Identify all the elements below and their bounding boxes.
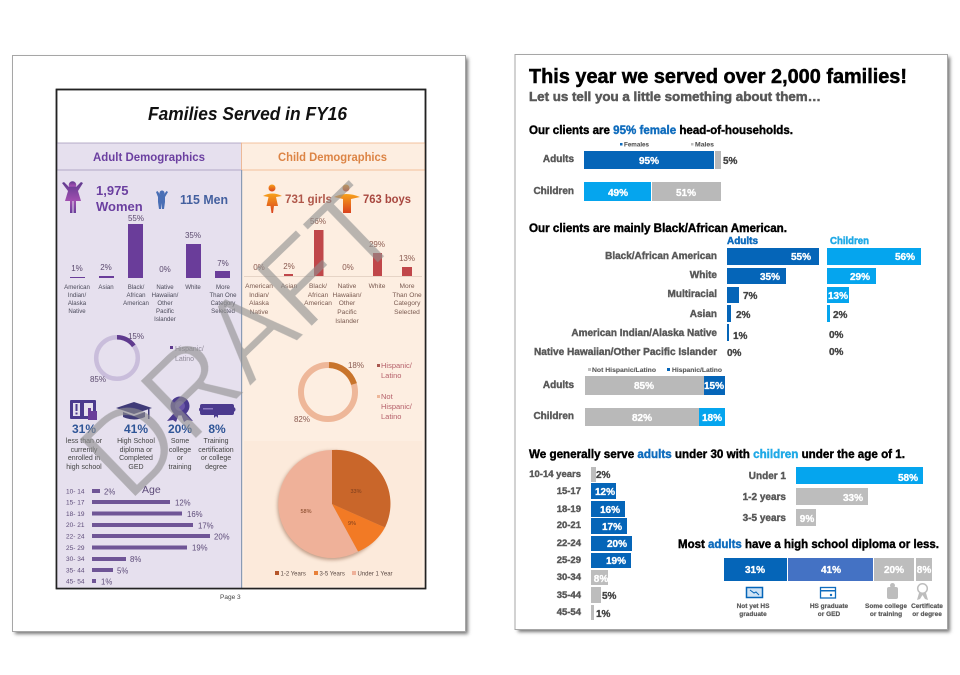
- bars: adult ages: 10-14 years: [529, 469, 581, 480]
- bar chart: adult race: American: [123, 300, 149, 307]
- education stats: currently: [71, 447, 98, 454]
- education stats: Some: [171, 438, 189, 445]
- bars: adult ages: 2%: [596, 470, 611, 481]
- education stats: degree: [205, 464, 227, 471]
- bar chart: adult race: Category: [211, 300, 236, 307]
- column headings: Adults: [727, 236, 758, 247]
- section: age: [529, 449, 923, 620]
- bar chart: child race: African: [308, 292, 329, 299]
- bar chart: child race: 2%: [283, 262, 295, 271]
- donut: child hispanic share: Hispanic/: [381, 402, 413, 411]
- bars: child ages: 33%: [843, 493, 863, 504]
- education stats: certification: [198, 447, 234, 454]
- pie chart: child age: 58%: [300, 509, 312, 515]
- bar chart: child race: Islander: [335, 318, 360, 325]
- stacked bars: Adults: [543, 380, 574, 391]
- bar chart: adult age: 10- 14: [66, 488, 85, 496]
- title: This year we served over 2,000 families!: [529, 65, 907, 88]
- education stats: 31%: [72, 422, 96, 436]
- bars: children: 0%: [829, 330, 844, 341]
- bar chart: adult age: 20- 21: [66, 522, 85, 529]
- education stats: [66, 422, 234, 471]
- bar chart: adult race: Alaska: [68, 300, 87, 307]
- pie chart: child age: 3-5 Years: [320, 572, 345, 578]
- bar chart: adult age: 18- 19: [66, 511, 85, 518]
- panel: adult demographics: [57, 143, 242, 588]
- bars: children: 13%: [828, 291, 848, 302]
- donut: child hispanic share: Not: [381, 392, 394, 401]
- section: female head of household: [529, 125, 793, 201]
- bar chart: adult age: 2%: [104, 488, 115, 496]
- page number: Page 3: [220, 594, 241, 601]
- icon: certificate: [820, 588, 836, 598]
- heading: Our clients are mainly Black/African American.: [529, 223, 787, 235]
- bar chart: adult age: 15- 17: [66, 500, 85, 506]
- stacked bars: [533, 151, 738, 201]
- education stats: High School: [117, 438, 155, 445]
- donut: child hispanic share: Latino: [381, 371, 401, 380]
- bars: adult ages: 20%: [607, 539, 627, 550]
- stacked bars: 49%: [608, 188, 628, 199]
- donut: child hispanic share: 18%: [348, 361, 364, 370]
- race labels: Asian: [690, 309, 717, 320]
- bar chart: adult age: 35- 44: [66, 568, 85, 574]
- women count: Women: [96, 199, 143, 214]
- bar chart: adult race: White: [185, 284, 201, 291]
- bar chart: child race: Asian: [281, 283, 298, 290]
- legend: Males: [695, 142, 715, 148]
- bar chart: child race: Indian/: [249, 292, 269, 299]
- captions: HS graduate: [810, 603, 849, 610]
- legend: Hispanic/Latino: [672, 368, 722, 374]
- girls count: 731 girls: [285, 192, 332, 206]
- bar chart: adult age: 20%: [214, 532, 230, 542]
- bar chart: child race: American: [245, 283, 273, 290]
- bars: adult ages: 17%: [602, 522, 622, 533]
- race labels: Multiracial: [668, 289, 717, 300]
- education stats: Completed: [119, 455, 153, 462]
- bars: children: 29%: [850, 272, 870, 283]
- frame outline: [56, 90, 426, 588]
- education stats: high school: [66, 464, 102, 471]
- bars: child ages: 3-5 years: [743, 513, 786, 524]
- stacked bar: 20%: [884, 565, 904, 576]
- bar chart: adult age: 8%: [130, 555, 141, 564]
- bar chart: adult age: 45- 54: [66, 578, 85, 586]
- bars: adult ages: 15-17: [557, 486, 581, 497]
- bars: adult ages: 16%: [600, 505, 620, 516]
- bar chart: adult race: 2%: [100, 263, 112, 272]
- bars: adult ages: [529, 467, 632, 620]
- icon: girl: [263, 184, 282, 213]
- subtitle: Let us tell you a little something about them…: [529, 90, 821, 104]
- bar chart: adult race: Hawaiian/: [152, 292, 179, 299]
- women count: 1,975: [96, 183, 129, 198]
- captions: graduate: [739, 611, 767, 618]
- bar chart: adult race: [64, 214, 237, 323]
- bar chart: adult race: 7%: [217, 259, 229, 268]
- bar chart: adult race: Asian: [98, 284, 114, 291]
- bar chart: adult age: 1%: [101, 578, 112, 586]
- legend: Females: [624, 142, 650, 148]
- captions: or training: [870, 611, 902, 618]
- stacked bars: Children: [533, 186, 574, 197]
- bar chart: child race: Pacific: [337, 309, 357, 316]
- heading: We generally serve adults under 30 with children under the age of 1.: [529, 449, 905, 461]
- bar chart: adult race: 0%: [159, 265, 171, 274]
- title: Families Served in FY16: [148, 104, 348, 124]
- bars: adults: 2%: [736, 310, 751, 321]
- bar chart: child race: [244, 217, 422, 325]
- bar chart: adult race: African: [127, 292, 145, 299]
- bars: adult ages: 45-54: [557, 607, 582, 618]
- education stats: Training: [203, 438, 229, 445]
- bar chart: adult race: Pacific: [156, 308, 174, 315]
- bar chart: child race: White: [369, 283, 386, 290]
- heading: adult demographics: Adult Demographics: [93, 150, 205, 164]
- stacked bars: Children: [533, 411, 574, 422]
- panel: this year summary page: [515, 54, 950, 632]
- legend: Not Hispanic/Latino: [592, 368, 656, 374]
- icon: rosette: [167, 396, 193, 422]
- bar chart: adult age: 12%: [175, 498, 191, 508]
- donut: adult hispanic share: 15%: [128, 332, 144, 341]
- stacked bars: 15%: [704, 381, 724, 392]
- bar chart: child race: Hawaiian/: [333, 292, 362, 299]
- education stats: college: [169, 447, 191, 454]
- education stats: less than or: [66, 438, 103, 445]
- panel divider: [241, 170, 242, 588]
- bar chart: adult age: 5%: [117, 566, 128, 576]
- education stats: enrolled in: [68, 455, 100, 462]
- bar chart: child race: Category: [394, 300, 421, 307]
- captions: Some college: [865, 603, 907, 610]
- bars: children: 0%: [829, 347, 844, 358]
- bar chart: child race: Alaska: [249, 300, 269, 307]
- bars: adult ages: 1%: [596, 609, 611, 620]
- education stats: or: [177, 455, 184, 462]
- section: race: [529, 223, 921, 359]
- bars: adults: 1%: [733, 331, 748, 342]
- bar chart: child race: Black/: [309, 283, 327, 290]
- pie chart: child age: [244, 441, 422, 586]
- bar chart: child race: American: [304, 300, 332, 307]
- bar chart: child race: Than One: [392, 292, 422, 299]
- stacked bars: 85%: [634, 381, 654, 392]
- bar chart: child race: 0%: [342, 263, 354, 272]
- column headings: [727, 236, 869, 247]
- bars: children: 56%: [895, 252, 915, 263]
- bar chart: child race: 0%: [253, 263, 265, 272]
- bar chart: child race: Native: [250, 309, 269, 316]
- bar chart: adult race: Than One: [209, 292, 237, 299]
- pie chart: child age: 9%: [348, 521, 356, 527]
- captions: or GED: [818, 611, 840, 618]
- heading: child demographics: Child Demographics: [278, 150, 387, 164]
- bar chart: child race: 29%: [369, 240, 385, 249]
- bars: adult ages: 8%: [594, 574, 608, 585]
- race labels: Black/African American: [605, 251, 717, 262]
- icon: tablet: [746, 588, 762, 598]
- bar chart: adult race: Black/: [128, 284, 145, 291]
- stacked bars: 51%: [676, 188, 696, 199]
- donut: adult hispanic share: Hispanic/: [175, 346, 204, 353]
- icon: man: [156, 190, 168, 209]
- education stats: diploma or: [120, 447, 153, 454]
- bar chart: adult race: Selected: [211, 308, 235, 315]
- bar chart: adult race: Native: [68, 308, 86, 315]
- bars: adults: [727, 248, 819, 359]
- bars: children: 2%: [833, 310, 848, 321]
- heading: Our clients are 95% female head-of-households.: [529, 125, 793, 137]
- bars: adult ages: 19%: [606, 556, 626, 567]
- bars: adults: 0%: [727, 348, 742, 359]
- icon: graduation cap: [116, 402, 152, 420]
- pie chart: child age: 33%: [350, 489, 362, 495]
- stacked bar: 41%: [821, 565, 841, 576]
- column headings: Children: [830, 236, 869, 247]
- section: education: [678, 539, 943, 618]
- race labels: White: [690, 270, 717, 281]
- bar chart: adult race: American: [64, 284, 90, 291]
- bar chart: child race: 13%: [399, 254, 415, 263]
- bar chart: adult race: More: [216, 284, 231, 291]
- bar chart: adult race: 1%: [71, 264, 83, 273]
- icon: backpack: [887, 583, 898, 599]
- bar chart: adult race: Native: [156, 284, 174, 291]
- bar chart: adult age: 22- 24: [66, 534, 85, 540]
- bar chart: adult age: 16%: [187, 510, 203, 519]
- stacked bars: 82%: [632, 413, 652, 424]
- bars: adult ages: 22-24: [557, 538, 582, 549]
- icon: not yet high school: [70, 400, 97, 420]
- education stats: GED: [128, 464, 144, 471]
- bar chart: adult age: 30- 34: [66, 556, 85, 563]
- education stats: training: [169, 464, 192, 471]
- education stats: 8%: [208, 422, 226, 436]
- bars: adult ages: 12%: [595, 487, 615, 498]
- bar chart: adult age: Age: [142, 484, 161, 496]
- education stats: 41%: [124, 422, 148, 436]
- icon: diploma: [199, 404, 236, 418]
- stacked bars: 5%: [723, 156, 738, 167]
- bars: adult ages: 5%: [602, 591, 617, 602]
- bars: child ages: 9%: [800, 514, 814, 525]
- donut: child hispanic share: Latino: [381, 412, 401, 421]
- donut: child hispanic share: Hispanic/: [381, 361, 413, 370]
- race labels: Native Hawaiian/Other Pacific Islander: [534, 347, 717, 358]
- bar chart: adult age: 19%: [192, 544, 208, 552]
- bars: adult ages: 18-19: [557, 504, 581, 515]
- bar chart: adult race: 35%: [185, 231, 201, 240]
- captions: [737, 603, 943, 618]
- race labels: [534, 251, 717, 358]
- title: [56, 90, 426, 588]
- race labels: American Indian/Alaska Native: [571, 328, 717, 339]
- icon: woman: [62, 181, 83, 213]
- bar chart: child race: Other: [339, 300, 356, 307]
- bars: adult ages: 35-44: [557, 590, 582, 601]
- icon: boy: [334, 184, 360, 213]
- bars: children: [827, 248, 921, 358]
- bar chart: adult age: 17%: [198, 522, 214, 530]
- stacked bars: Adults: [543, 154, 574, 165]
- bar chart: adult race: Indian/: [68, 292, 86, 299]
- donut: adult hispanic share: 85%: [90, 375, 106, 384]
- pie chart: child age: Under 1 Year: [358, 572, 393, 578]
- heading: Most adults have a high school diploma or less.: [678, 539, 939, 551]
- bars: adults: 55%: [791, 252, 811, 263]
- bar chart: adult age: [66, 484, 230, 586]
- bars: child ages: [743, 467, 923, 526]
- bar chart: child race: Selected: [394, 309, 420, 316]
- stacked bar: [724, 558, 932, 581]
- captions: or degree: [912, 611, 942, 618]
- bar chart: child race: 56%: [310, 217, 326, 226]
- men count: 115 Men: [180, 192, 228, 207]
- bar chart: child race: Native: [338, 283, 357, 290]
- donut: child hispanic share: [294, 361, 413, 424]
- bar chart: adult age: 25- 29: [66, 545, 85, 552]
- bars: adults: 35%: [760, 272, 780, 283]
- pie chart: child age: 1-2 Years: [280, 572, 306, 578]
- legend: [588, 368, 722, 374]
- captions: Certificate: [911, 603, 943, 610]
- stacked bars: 95%: [639, 156, 659, 167]
- legend: [620, 142, 715, 148]
- captions: Not yet HS: [737, 603, 770, 610]
- education stats: or college: [201, 455, 231, 462]
- bars: child ages: 58%: [898, 473, 918, 484]
- bars: adult ages: 25-29: [557, 555, 581, 566]
- bars: adult ages: 20-21: [557, 520, 582, 531]
- stacked bar: 8%: [917, 565, 931, 576]
- boys count: 763 boys: [363, 192, 411, 206]
- donut: adult hispanic share: [90, 332, 204, 384]
- donut: child hispanic share: 82%: [294, 415, 310, 424]
- bar chart: adult race: Islander: [154, 316, 176, 323]
- section: hispanic bars: [533, 368, 725, 426]
- bars: adults: 7%: [743, 291, 758, 302]
- bars: adult ages: 30-34: [557, 572, 582, 583]
- watermark: DRAFT: DRAFT: [55, 159, 425, 523]
- bar chart: adult race: Other: [157, 300, 173, 307]
- stacked bars: 18%: [702, 413, 722, 424]
- stacked bar: 31%: [745, 565, 765, 576]
- icon: ribbon: [917, 584, 928, 600]
- bars: child ages: Under 1: [749, 471, 786, 482]
- stacked bars: [533, 376, 725, 426]
- bar chart: child race: More: [399, 283, 415, 290]
- bar chart: adult race: 55%: [128, 214, 144, 223]
- education stats: 20%: [168, 422, 192, 436]
- bars: child ages: 1-2 years: [743, 492, 786, 503]
- donut: adult hispanic share: Latino: [175, 356, 194, 363]
- panel: child demographics: [55, 90, 426, 601]
